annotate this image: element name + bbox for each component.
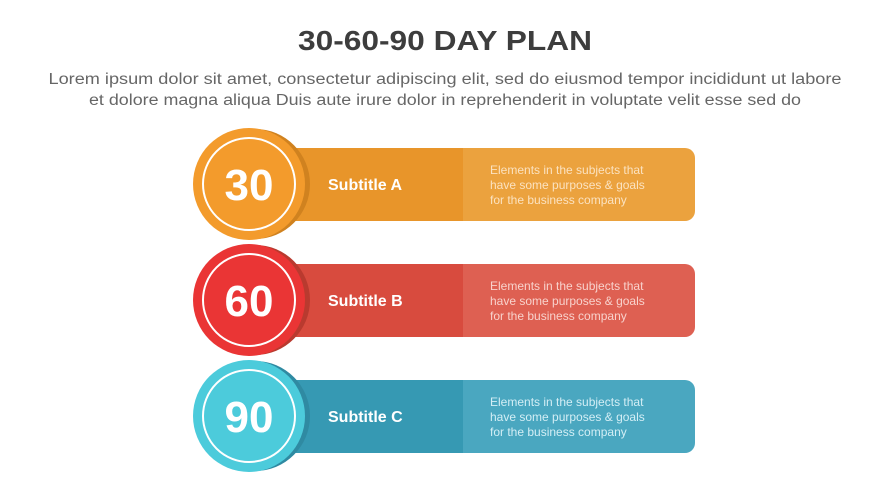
- description A: for the business company: [490, 193, 627, 207]
- description A: Elements in the subjects that: [490, 163, 644, 177]
- description C: for the business company: [490, 425, 627, 439]
- description C: [490, 395, 645, 439]
- description B: for the business company: [490, 309, 627, 323]
- subtitle text: [48, 71, 842, 109]
- circle: 60: [193, 244, 305, 356]
- description A: have some purposes & goals: [490, 178, 645, 192]
- description B: [490, 279, 645, 323]
- circle: 90: [193, 360, 305, 472]
- subtitle A: Subtitle A: [328, 177, 403, 194]
- subtitle text: et dolore magna aliqua Duis aute irure dolor in reprehenderit in voluptate velit esse sed do: [89, 92, 801, 109]
- description B: Elements in the subjects that: [490, 279, 644, 293]
- circle: 30: [193, 128, 305, 240]
- description B: have some purposes & goals: [490, 294, 645, 308]
- subtitle C: Subtitle C: [328, 409, 403, 426]
- description C: Elements in the subjects that: [490, 395, 644, 409]
- description C: have some purposes & goals: [490, 410, 645, 424]
- circle: 90: 90: [225, 393, 273, 442]
- circle: 60: 60: [225, 277, 273, 326]
- subtitle text: Lorem ipsum dolor sit amet, consectetur adipiscing elit, sed do eiusmod tempor incididunt ut labore: [48, 71, 842, 88]
- circle: 30: 30: [225, 161, 273, 210]
- subtitle B: Subtitle B: [328, 293, 403, 310]
- row: 30 days: [193, 128, 695, 240]
- row: 60 days: [193, 244, 695, 356]
- row: 90 days: [193, 360, 695, 472]
- description A: [490, 163, 645, 207]
- title: 30-60-90 DAY PLAN: [298, 25, 592, 56]
